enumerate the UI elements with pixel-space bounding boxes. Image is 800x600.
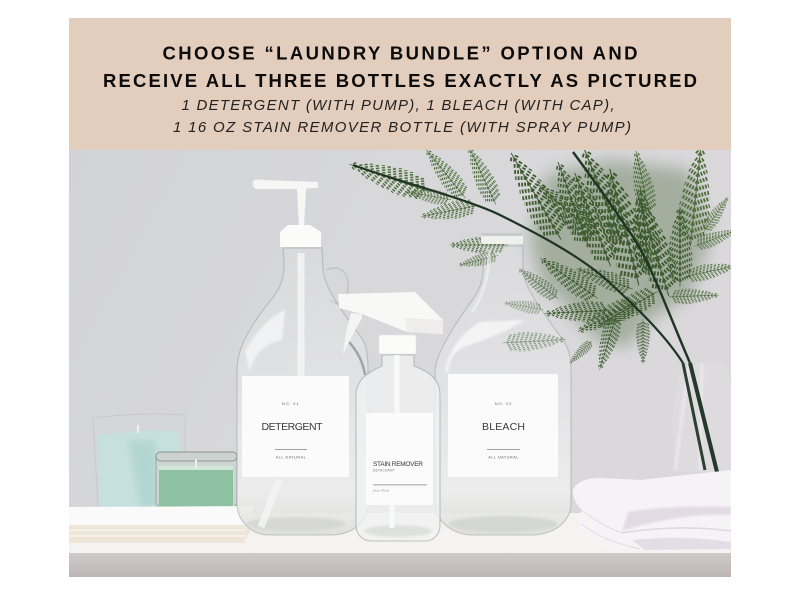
label name: STAIN REMOVER: [373, 461, 423, 468]
subheading line 1: 1 DETERGENT (WITH PUMP), 1 BLEACH (WITH CAP),: [182, 97, 614, 114]
glass vase: [674, 362, 719, 472]
highlights: [245, 310, 285, 372]
shelf: [69, 513, 731, 577]
small green candle: [156, 452, 237, 507]
label name: BLEACH: [482, 421, 525, 433]
bleach bottle: [435, 233, 571, 535]
label number: NO. 02: [495, 401, 512, 406]
large candle: [93, 414, 185, 507]
folded towels: [573, 470, 731, 551]
paper stack: [69, 506, 255, 543]
cap: [481, 233, 523, 244]
infographic canvas: [69, 18, 731, 577]
label note: ALL NATURAL: [276, 456, 306, 460]
highlights: [445, 320, 525, 372]
label: [242, 376, 349, 477]
label: [366, 413, 433, 505]
wall background: [69, 150, 731, 515]
spray cap: [379, 335, 416, 354]
fern plant: [345, 143, 739, 372]
handle: [326, 268, 348, 304]
detergent bottle: [237, 179, 368, 535]
stain remover spray bottle: [338, 292, 443, 541]
spray head: [338, 292, 443, 355]
pump: [253, 179, 321, 247]
heading line 1: CHOOSE “LAUNDRY BUNDLE” OPTION AND: [162, 42, 638, 64]
dip tube: [261, 253, 301, 527]
glass body: [356, 355, 440, 541]
label subtitle: DETACHANT: [373, 468, 395, 472]
dip tube: [392, 355, 397, 528]
label number: NO. 01: [282, 401, 299, 406]
glass body: [237, 248, 368, 535]
photo panel: [69, 143, 739, 577]
label note: ALL NATURAL: [488, 456, 519, 460]
label size: 16 oz / 473 ml: [373, 490, 389, 492]
subheading line 2: 1 16 OZ STAIN REMOVER BOTTLE (WITH SPRAY PUMP): [173, 119, 631, 136]
label name: DETERGENT: [262, 421, 323, 433]
label: [448, 374, 558, 477]
heading line 2: RECEIVE ALL THREE BOTTLES EXACTLY AS PICTURED: [103, 70, 697, 91]
glass body: [435, 246, 571, 535]
fern main stems: [353, 165, 683, 363]
header band: [69, 18, 731, 150]
